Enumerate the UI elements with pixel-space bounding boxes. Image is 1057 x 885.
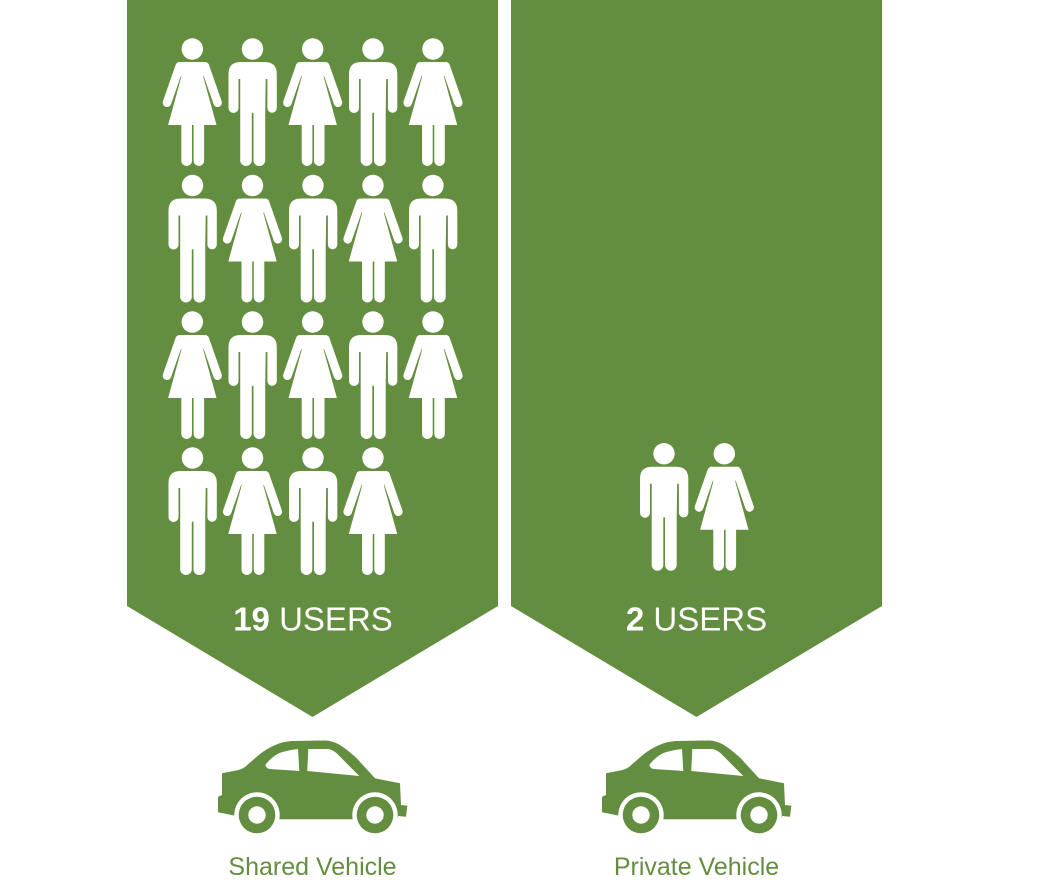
people: 19 users xyxy=(167,38,458,575)
panel: private vehicle xyxy=(511,0,882,881)
banner: private vehicle arrow xyxy=(511,0,882,717)
panel: shared vehicle xyxy=(127,0,498,881)
people: 2 users xyxy=(640,443,750,571)
count: 2 users: 2 USERS xyxy=(626,600,767,638)
count: 19 users: 19 USERS xyxy=(233,600,393,638)
icon: shared car xyxy=(218,740,407,838)
label: shared vehicle: Shared Vehicle xyxy=(228,853,397,881)
icon: private car xyxy=(602,740,791,838)
label: private vehicle: Private Vehicle xyxy=(614,853,779,881)
banner: shared vehicle arrow xyxy=(127,0,498,717)
